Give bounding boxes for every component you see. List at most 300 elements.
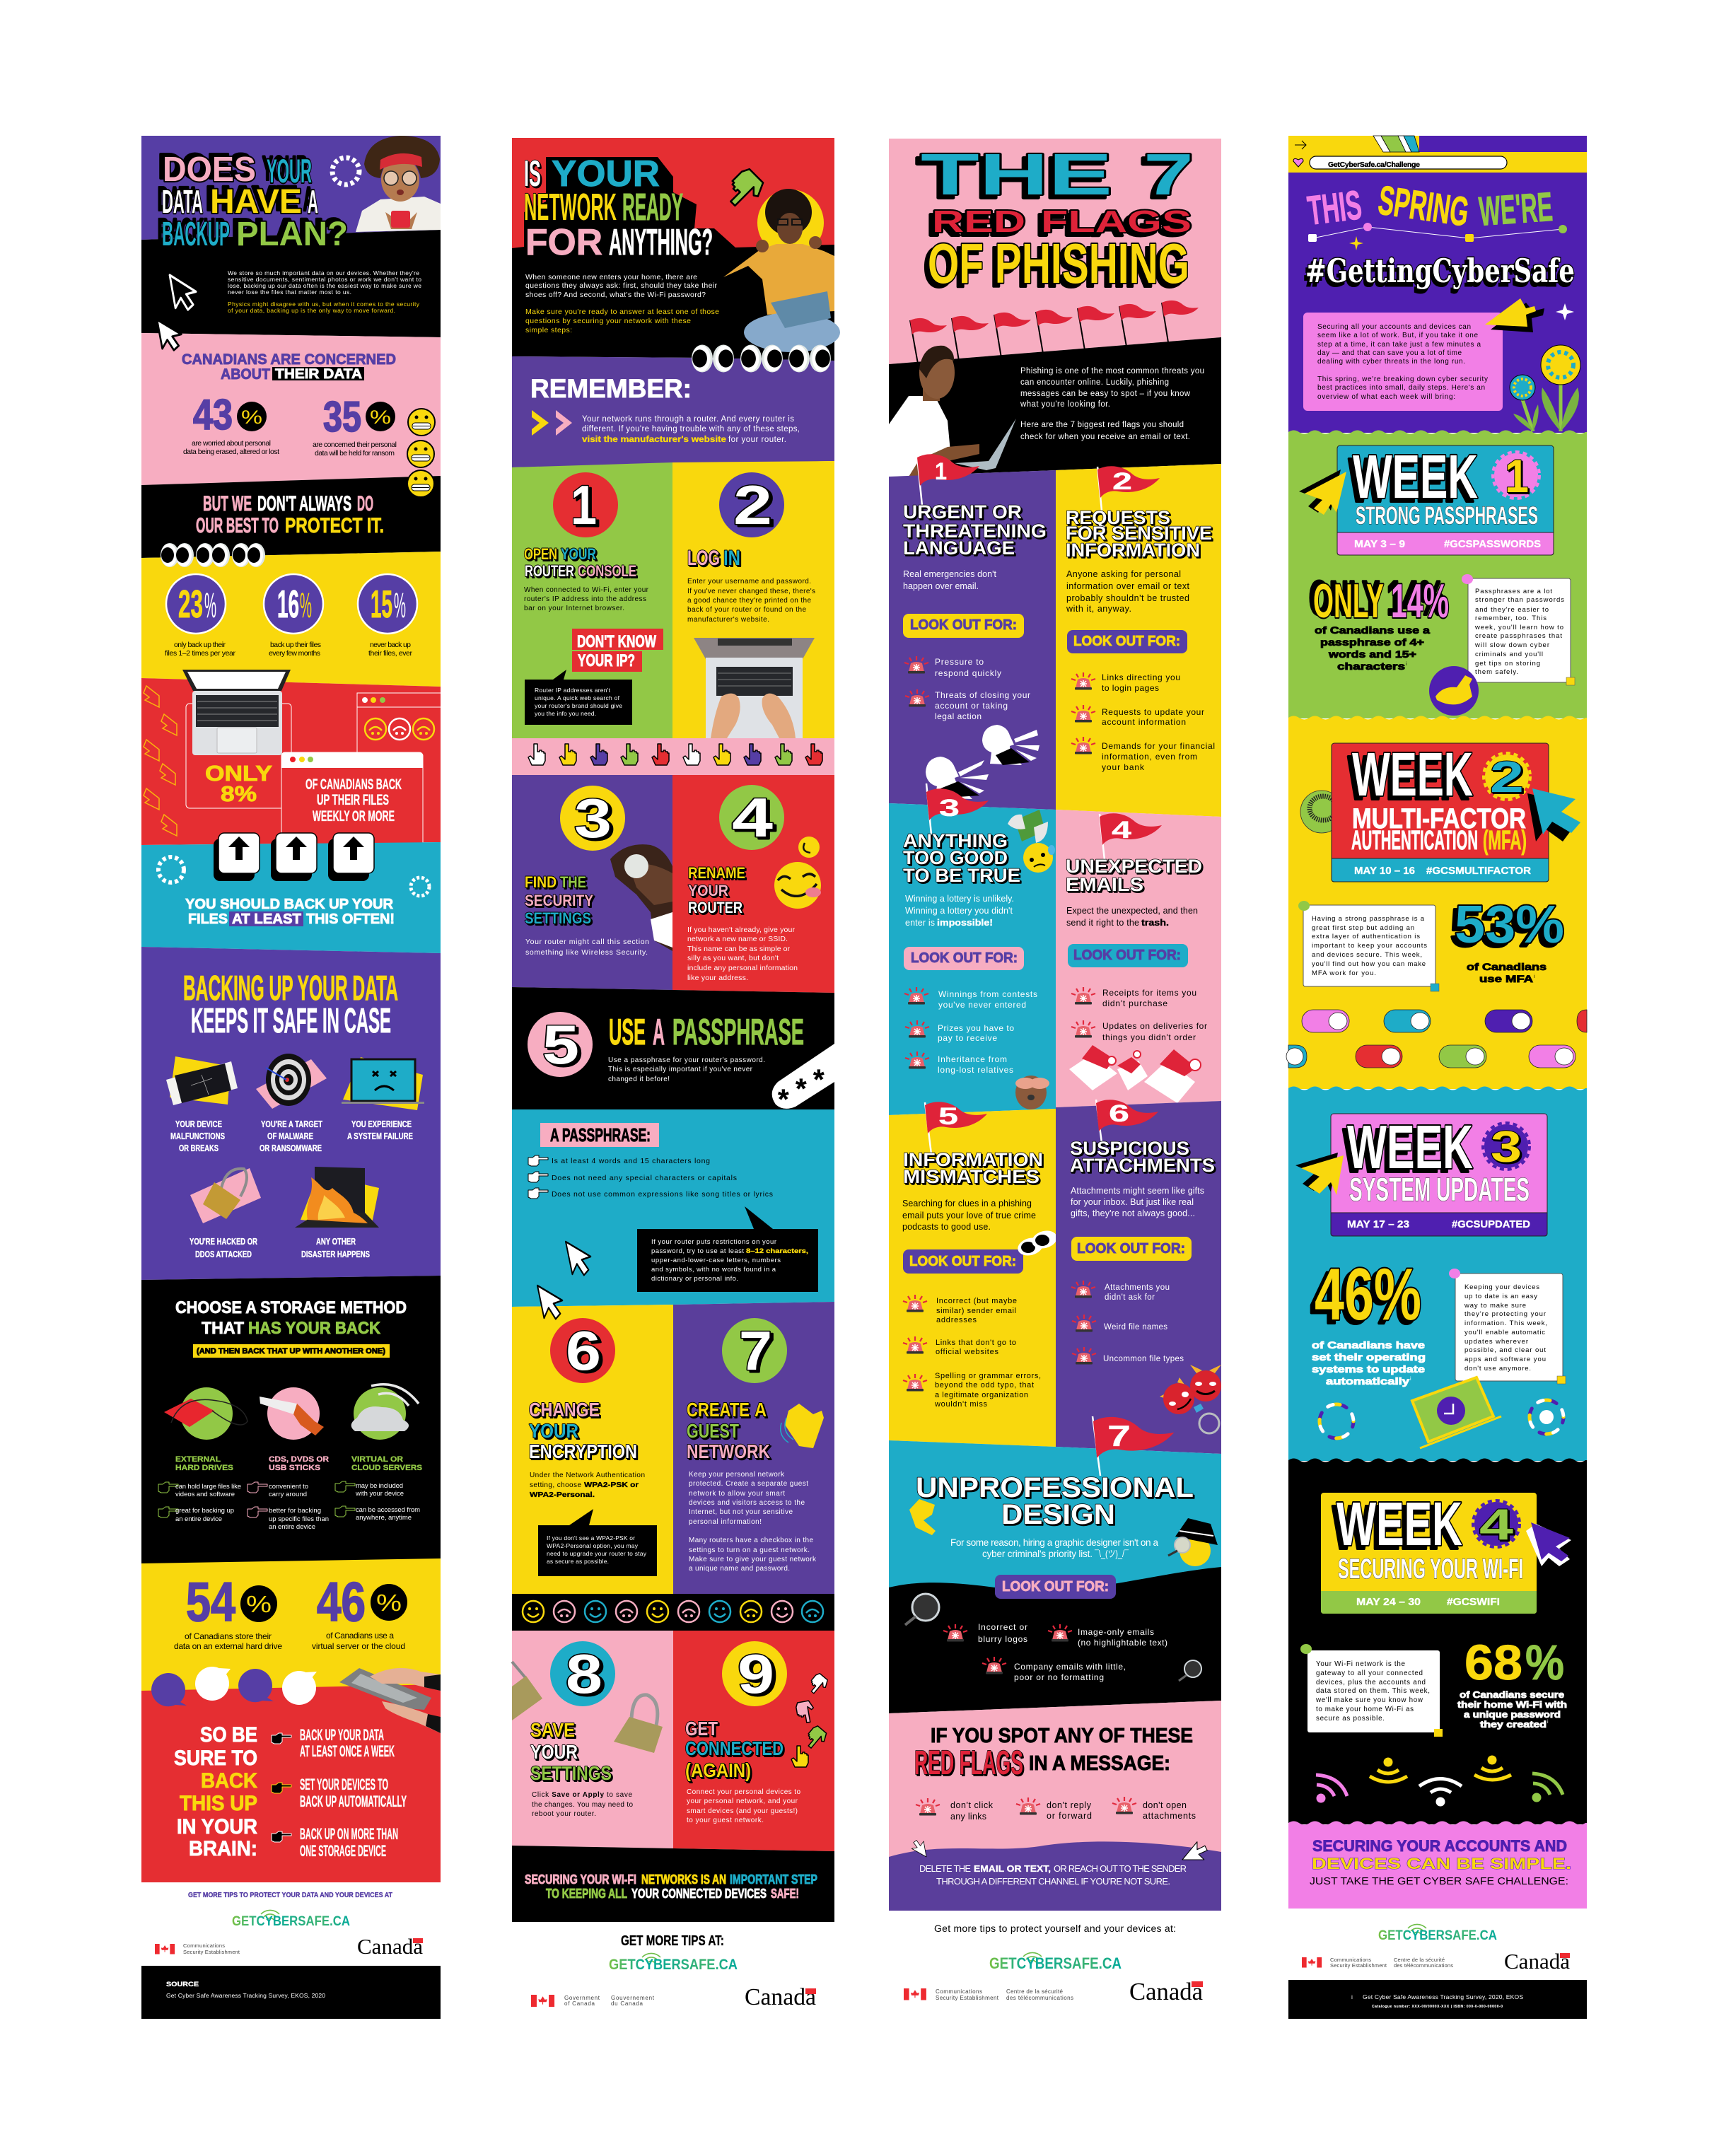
icon: multicolour loaders bbox=[1320, 1400, 1563, 1438]
intro text bbox=[228, 269, 421, 314]
panel: keeps it safe in case bbox=[141, 947, 441, 1280]
step heading: LOG bbox=[687, 547, 720, 570]
stat: 23 percent bbox=[165, 574, 236, 658]
heading: IF YOU SPOT ANY OF THESE bbox=[931, 1725, 1193, 1747]
icon: eyes bbox=[692, 344, 831, 373]
heading bbox=[1066, 856, 1202, 895]
panel: a passphrase definition bbox=[512, 1109, 834, 1307]
text block: trash. bbox=[1141, 918, 1169, 928]
list: attachments bbox=[1143, 1811, 1196, 1821]
callout: If you don't see a WPA2-PSK or bbox=[547, 1534, 635, 1542]
icon: yellow cursor bbox=[1485, 298, 1544, 332]
icon: yellow cursor bbox=[1299, 470, 1346, 515]
item: virtual or cloud servers: VIRTUAL OR bbox=[351, 1455, 403, 1464]
item: virtual or cloud servers: may be included bbox=[356, 1482, 403, 1490]
step text: router's IP address into the address bbox=[524, 595, 646, 603]
stat: 43 percent: 43 bbox=[193, 391, 233, 438]
text card: remember, too. This bbox=[1475, 614, 1547, 622]
week card: MAY 24 – 30 bbox=[1356, 1596, 1421, 1608]
footer: tips and logos: Gouvernement bbox=[611, 1995, 655, 2001]
heading: CANADIANS ARE CONCERNED bbox=[182, 351, 396, 368]
heading: PASSPHRASE bbox=[672, 1012, 804, 1053]
callout: dictionary or personal info. bbox=[651, 1275, 738, 1283]
footer: tips and logos: GETCYBERSAFE.CA bbox=[609, 1957, 738, 1973]
text block: visit the manufacturer's website bbox=[582, 436, 726, 444]
text box bbox=[1303, 313, 1503, 411]
list: to login pages bbox=[1102, 683, 1159, 693]
heading bbox=[1070, 1138, 1215, 1176]
text block bbox=[950, 1537, 1158, 1559]
text block bbox=[902, 1199, 1036, 1232]
list: Links directing you bbox=[1102, 672, 1180, 682]
week card bbox=[1321, 1490, 1537, 1614]
heading: IN A MESSAGE: bbox=[1029, 1752, 1170, 1775]
intro text bbox=[525, 273, 719, 334]
item: external hard drives: videos and software bbox=[175, 1491, 235, 1498]
footer: tips and logos: Canada bbox=[357, 1934, 423, 1959]
step text: the changes. You may need to bbox=[532, 1801, 633, 1809]
icon: grimacing emoji bbox=[407, 470, 434, 497]
step text: Many routers have a checkbox in the bbox=[689, 1537, 813, 1544]
step heading: NETWORK bbox=[687, 1440, 770, 1462]
panel: flag 5 information mismatches bbox=[889, 1076, 1059, 1447]
intro text: Phishing is one of the most common threats you bbox=[1020, 367, 1204, 375]
stat: 16 percent: 16 bbox=[277, 582, 299, 626]
heading bbox=[182, 351, 396, 383]
panel: header with title and intro bbox=[512, 138, 840, 361]
intro text: messages can be easy to spot – if you know bbox=[1020, 390, 1191, 398]
week card: 4 bbox=[1479, 1501, 1514, 1549]
text card: apps and software you bbox=[1464, 1356, 1546, 1363]
step heading bbox=[525, 873, 593, 927]
photo: man with magnifying glass bbox=[610, 844, 672, 951]
item: external hard drives: great for backing up bbox=[175, 1507, 234, 1515]
panel: browser bar bbox=[1288, 136, 1587, 173]
text card: will slow down cyber bbox=[1474, 641, 1549, 649]
step text: setting, choose bbox=[530, 1481, 581, 1489]
panel: flag 1 urgent or threatening language bbox=[889, 454, 1056, 810]
title: DOES bbox=[163, 151, 256, 189]
stat: 15 percent bbox=[358, 574, 417, 658]
panel: emoji band bbox=[512, 1594, 834, 1631]
panel: title bbox=[889, 139, 1221, 364]
stat: 68 percent: i bbox=[1547, 1720, 1549, 1725]
footer: tips and logos: Centre de la sécurité bbox=[1006, 1988, 1064, 1995]
intro text: Here are the 7 biggest red flags you should bbox=[1020, 421, 1184, 429]
text card: them safely. bbox=[1475, 668, 1518, 676]
list bbox=[904, 987, 1037, 1075]
panel: but we don't always do our best bbox=[141, 441, 441, 558]
text card: Passphrases are a lot bbox=[1475, 588, 1552, 595]
text block bbox=[1066, 569, 1190, 614]
week card: MAY 10 – 16 bbox=[1354, 865, 1415, 877]
item: open padlock bbox=[190, 1168, 261, 1259]
panel: challenge call to action: DEVICES CAN BE SIMPLE. bbox=[1312, 1855, 1571, 1872]
icon: shouting heads bbox=[926, 725, 1039, 799]
week card: 2 bbox=[1490, 753, 1524, 802]
text card: Keeping your devices bbox=[1464, 1283, 1539, 1291]
step heading: GUEST bbox=[687, 1420, 739, 1442]
icon: waving hand bbox=[781, 1404, 824, 1448]
callout: need to upgrade your router to stay bbox=[547, 1550, 647, 1557]
title: HAVE bbox=[210, 183, 302, 221]
list: Demands for your financial bbox=[1102, 741, 1215, 751]
item: laptop on fire bbox=[295, 1167, 379, 1259]
text block: Winning a lottery you didn't bbox=[905, 906, 1013, 916]
panel: step 1 bbox=[512, 462, 672, 738]
browser window callout: OF CANADIANS BACK bbox=[305, 776, 402, 793]
step heading: (AGAIN) bbox=[685, 1759, 751, 1781]
icon: loading ring bbox=[158, 857, 184, 882]
tips list: BACK UP AUTOMATICALLY bbox=[300, 1793, 407, 1810]
look out for pill bbox=[903, 1249, 1023, 1274]
stat: 16 percent: % bbox=[300, 585, 312, 625]
photo: surprised woman with phone bbox=[356, 136, 441, 232]
text block: OR REACH OUT TO THE SENDER bbox=[1054, 1863, 1187, 1874]
browser window callout bbox=[281, 752, 423, 848]
week card: MAY 17 – 23 bbox=[1347, 1218, 1409, 1230]
step text: reboot your router. bbox=[532, 1810, 596, 1818]
heading: ABOUT bbox=[221, 366, 270, 383]
stat: only 14 percent: passphrase of 4+ bbox=[1320, 636, 1424, 648]
heading: INFORMATION bbox=[1066, 540, 1200, 561]
footer: tips and logos: Get more tips to protect yourself and your devices at: bbox=[934, 1923, 1176, 1934]
text block: gifts, they're not always good... bbox=[1071, 1208, 1195, 1218]
stat: only 14 percent: of Canadians use a bbox=[1315, 624, 1430, 636]
heading: THAT bbox=[202, 1319, 244, 1338]
heading bbox=[183, 969, 398, 1040]
step heading: YOUR bbox=[530, 1741, 578, 1763]
stat: only 8 percent bbox=[205, 761, 272, 806]
heading: TOO GOOD bbox=[903, 847, 1008, 868]
heading: MISMATCHES bbox=[903, 1166, 1039, 1187]
photo: man with laptop bbox=[889, 346, 1016, 477]
callout: 8–12 characters, bbox=[746, 1247, 808, 1255]
icon: laptop with clock bbox=[1412, 1377, 1501, 1448]
stat: 54 percent: % bbox=[246, 1591, 272, 1617]
panel: week 3 bbox=[1288, 1086, 1587, 1461]
panel: step 3 bbox=[512, 775, 672, 990]
heading: CHOOSE A STORAGE METHOD bbox=[175, 1298, 407, 1317]
callout: don't know your IP bbox=[525, 629, 663, 725]
panel: header with title and intro: ANYTHING? bbox=[609, 222, 713, 263]
stat: only 14 percent: characters bbox=[1337, 660, 1405, 672]
heading: URGENT OR bbox=[903, 501, 1022, 523]
step text: If you've never changed these, there's bbox=[687, 588, 815, 595]
stat: 43 percent: % bbox=[241, 407, 262, 428]
stat: only 14 percent: 14% bbox=[1391, 574, 1449, 628]
intro text: simple steps: bbox=[525, 326, 572, 334]
week card: WEEK bbox=[1352, 740, 1473, 809]
flag number 5: 5 bbox=[938, 1103, 958, 1130]
panel: week 2 bbox=[1286, 716, 1587, 1089]
look out for pill bbox=[1071, 1237, 1192, 1261]
step heading: YOUR bbox=[529, 1420, 578, 1442]
intro text: can encounter online. Luckily, phishing bbox=[1020, 378, 1169, 387]
title: YOUR bbox=[267, 152, 312, 190]
icon: eyes bbox=[1016, 1228, 1059, 1258]
tips list: BACK UP YOUR DATA bbox=[300, 1726, 384, 1744]
footer: logos bbox=[1302, 1924, 1570, 1974]
title: IS bbox=[524, 153, 541, 194]
intro text: We store so much important data on our devices. Whether they're bbox=[228, 269, 419, 276]
flag number 4: 4 bbox=[1112, 817, 1131, 844]
panel: column 4, this spring we're getting cyber safe bbox=[1286, 136, 1587, 2019]
icon: fingerprint bbox=[1300, 791, 1343, 833]
panel: back up at least this often bbox=[141, 833, 441, 953]
intro text: check for when you receive an email or text. bbox=[1020, 433, 1190, 441]
heading: EMAILS bbox=[1066, 874, 1143, 895]
week card bbox=[1332, 740, 1549, 882]
footer: tips and logos: des télécommunications bbox=[1006, 1995, 1073, 2001]
photo: hands on tablet bbox=[339, 1668, 441, 1733]
text card: Having a strong passphrase is a bbox=[1312, 915, 1425, 923]
icon: password pill: * bbox=[778, 1084, 789, 1115]
step heading: CONNECTED bbox=[685, 1737, 784, 1759]
intro text: never lose the files that matter most to us. bbox=[228, 289, 351, 296]
text card bbox=[1300, 1644, 1443, 1737]
text card: extra layer of authentication is bbox=[1312, 933, 1420, 940]
photo: woman with laptop bbox=[723, 189, 840, 352]
text card: updates wherever bbox=[1464, 1338, 1528, 1346]
intro text bbox=[1020, 367, 1204, 441]
list: didn't ask for bbox=[1105, 1293, 1155, 1302]
item: dartboard bbox=[256, 1054, 327, 1153]
flag number 3 bbox=[926, 783, 989, 834]
footer: tips and logos bbox=[155, 1892, 423, 1959]
title: OF PHISHING bbox=[928, 232, 1189, 295]
text card: and they're easier to bbox=[1475, 606, 1549, 614]
heading: PROTECT IT. bbox=[285, 514, 384, 537]
flag number 3: 3 bbox=[939, 795, 960, 822]
list: you've never entered bbox=[938, 1000, 1026, 1010]
footer: tips and logos: Government bbox=[564, 1995, 600, 2001]
stat: only 14 percent: i bbox=[1406, 662, 1407, 667]
panel: step 7 bbox=[537, 1278, 834, 1594]
step text: Connect your personal devices to bbox=[687, 1788, 800, 1796]
item: external hard drives: EXTERNAL bbox=[175, 1455, 221, 1464]
step text: Click Save or Apply to save bbox=[532, 1791, 632, 1799]
stat: 68 percent bbox=[1457, 1635, 1567, 1730]
list: Incorrect (but maybe bbox=[936, 1297, 1017, 1305]
text card bbox=[1462, 574, 1575, 685]
title: RED bbox=[932, 204, 1025, 239]
panel: challenge call to action: JUST TAKE THE GET CYBER SAFE CHALLENGE: bbox=[1310, 1875, 1568, 1887]
panel: closing message: SAFE! bbox=[771, 1887, 799, 1901]
intro text: shoes off? And second, what's the Wi-Fi password? bbox=[525, 291, 706, 299]
item: laptop on fire: ANY OTHER bbox=[316, 1237, 356, 1247]
panel: Canadians are concerned bbox=[141, 315, 441, 485]
title: YOUR bbox=[552, 153, 660, 194]
item: broken phone bbox=[166, 1056, 238, 1153]
footer: tips and logos bbox=[904, 1923, 1203, 2005]
item: broken phone: OR BREAKS bbox=[179, 1143, 219, 1153]
stat: 46 percent: of Canadians have bbox=[1312, 1339, 1425, 1351]
stat: 23 percent: 23 bbox=[178, 582, 203, 626]
text block bbox=[1071, 1186, 1204, 1218]
list: Uncommon file types bbox=[1103, 1355, 1184, 1363]
step text: smart devices (and your guests!) bbox=[687, 1807, 798, 1815]
item: broken phone: YOUR DEVICE bbox=[175, 1119, 222, 1129]
panel: flag 2 requests for sensitive information bbox=[1056, 464, 1221, 817]
stat: 53 percent: 53% bbox=[1455, 895, 1564, 954]
callout: don't know your IP: DON'T KNOW bbox=[577, 632, 656, 651]
panel: step 9 bbox=[673, 1631, 834, 1851]
icon: password pill: * bbox=[796, 1073, 807, 1105]
text box: dealing with cyber threats in the long run. bbox=[1317, 358, 1465, 366]
list: your bank bbox=[1102, 762, 1145, 772]
list: Prizes you have to bbox=[938, 1023, 1014, 1033]
panel: column 1, does your data have a backup plan bbox=[141, 136, 441, 2019]
title: THE bbox=[921, 141, 1112, 207]
icon: magnifiers bbox=[905, 1594, 1201, 1681]
heading: REQUESTS bbox=[1066, 507, 1170, 528]
panel: flag 4 unexpected emails bbox=[1056, 810, 1221, 1107]
step heading: RENAME bbox=[688, 864, 745, 882]
list: didn't purchase bbox=[1102, 998, 1167, 1008]
text card: important to keep your accounts bbox=[1312, 942, 1427, 950]
step text: Enter your username and password. bbox=[687, 578, 811, 585]
stat: 53 percent: i bbox=[1534, 974, 1535, 979]
footer: tips and logos: Canada bbox=[745, 1984, 816, 2010]
step text: Under the Network Authentication bbox=[530, 1472, 645, 1479]
look out for pill bbox=[1067, 630, 1187, 653]
text card: to make your home Wi-Fi as bbox=[1316, 1706, 1414, 1713]
stat: only 14 percent bbox=[1313, 574, 1449, 672]
panel: step 2 bbox=[672, 461, 834, 738]
item: CDs, DVDs or USB sticks: better for backing bbox=[269, 1507, 321, 1515]
stat: 16 percent bbox=[264, 574, 323, 658]
heading: FOR SENSITIVE bbox=[1066, 523, 1212, 544]
number badge bbox=[553, 472, 618, 537]
text block: information over email or text bbox=[1066, 581, 1190, 591]
intro text: Physics might disagree with us, but when it comes to the security bbox=[228, 301, 420, 308]
item: virtual or cloud servers: can be accessed from bbox=[356, 1506, 420, 1514]
heading bbox=[916, 1472, 1194, 1530]
source bar: Catalogue number: XXX-00/0000X-XXX | ISBN: 000-0-000-00000-0 bbox=[1372, 2005, 1503, 2009]
step text: include any personal information bbox=[687, 964, 798, 972]
heading bbox=[175, 1298, 407, 1358]
number badge bbox=[719, 472, 784, 537]
look out for pill: LOOK OUT FOR: bbox=[1077, 1241, 1185, 1257]
list: Receipts for items you bbox=[1102, 988, 1196, 998]
week card: #GCSWIFI bbox=[1447, 1596, 1500, 1608]
stat: 35 percent: % bbox=[370, 407, 391, 428]
step text: network a new name or SSID. bbox=[687, 935, 788, 943]
heading: A bbox=[653, 1012, 665, 1053]
stat: 46 percent: i bbox=[1410, 1377, 1411, 1382]
step heading: THE bbox=[560, 873, 586, 891]
text block: email puts your love of true crime bbox=[902, 1211, 1036, 1220]
panel: challenge call to action: SECURING YOUR ACCOUNTS AND bbox=[1312, 1837, 1567, 1855]
step text: silly as you want, but don't bbox=[687, 954, 779, 962]
title: 7 bbox=[1143, 141, 1194, 207]
list: Requests to update your bbox=[1102, 707, 1204, 717]
icon: wifi symbols bbox=[1316, 1757, 1563, 1805]
step text: back of your router or found on the bbox=[687, 606, 806, 614]
browser window callout: WEEKLY OR MORE bbox=[313, 808, 395, 824]
heading: INFORMATION bbox=[903, 1149, 1043, 1170]
callout: upper-and-lower-case letters, numbers bbox=[651, 1257, 781, 1264]
stat: 23 percent: % bbox=[204, 585, 216, 625]
panel: browser bar: GetCyberSafe.ca/Challenge bbox=[1328, 161, 1420, 169]
stat: 35 percent: data will be held for ransom bbox=[315, 449, 395, 458]
callout: don't know your IP: YOUR IP? bbox=[578, 651, 635, 670]
title: READY bbox=[622, 186, 683, 228]
step text: network to allow your smart bbox=[689, 1490, 785, 1498]
flag number 7 bbox=[1093, 1416, 1174, 1476]
step text: WPA2-Personal. bbox=[530, 1491, 595, 1499]
text box: Securing all your accounts and devices can bbox=[1317, 323, 1471, 331]
callout bbox=[538, 1509, 657, 1576]
panel: header with title and intro bbox=[141, 136, 441, 337]
heading: LANGUAGE bbox=[903, 537, 1015, 559]
item: dartboard: YOU'RE A TARGET bbox=[261, 1119, 322, 1129]
step heading bbox=[687, 1399, 770, 1462]
stat: 46 percent bbox=[1312, 1254, 1426, 1387]
step text: like your address. bbox=[687, 974, 748, 982]
intro text: what you're looking for. bbox=[1020, 400, 1110, 409]
footer: logos: Communications bbox=[1330, 1957, 1371, 1963]
list bbox=[1071, 672, 1215, 772]
text block: Attachments might seem like gifts bbox=[1071, 1186, 1204, 1196]
icon: thumbs down bbox=[909, 1499, 936, 1535]
stat: 53 percent: of Canadians bbox=[1467, 961, 1547, 972]
text box: best practices into small, daily steps. Here's an bbox=[1317, 384, 1485, 392]
source bar: Get Cyber Safe Awareness Tracking Survey, 2020, EKOS bbox=[1363, 1993, 1523, 2000]
heading bbox=[914, 1725, 1193, 1782]
checklist bbox=[528, 1155, 773, 1199]
number badge bbox=[722, 1318, 787, 1383]
panel: closing message bbox=[512, 1846, 834, 1922]
text card: data stored on them. This week, bbox=[1316, 1687, 1430, 1695]
step heading: GET bbox=[685, 1718, 718, 1740]
heading bbox=[609, 1012, 804, 1053]
list: Updates on deliveries for bbox=[1102, 1021, 1207, 1031]
heading: BUT WE bbox=[203, 492, 252, 515]
tips list: SET YOUR DEVICES TO bbox=[300, 1776, 388, 1793]
stat: 46 percent: set their operating bbox=[1312, 1351, 1426, 1363]
stat: 68 percent: their home Wi-Fi with bbox=[1457, 1699, 1567, 1710]
heading bbox=[903, 1149, 1043, 1187]
item: dartboard: OR RANSOMWARE bbox=[260, 1143, 322, 1153]
heading: HAS YOUR BACK bbox=[248, 1319, 381, 1338]
heading: AT LEAST bbox=[232, 911, 301, 927]
icon: teal cursor bbox=[1527, 788, 1580, 841]
item: failed laptop bbox=[342, 1057, 424, 1141]
list: Image-only emails bbox=[1078, 1627, 1154, 1637]
step text: devices and visitors access to the bbox=[689, 1499, 805, 1507]
panel: closing message: SECURING YOUR WI-FI bbox=[525, 1872, 636, 1887]
step heading: ROUTER bbox=[688, 899, 742, 916]
panel: choose a storage method bbox=[141, 1276, 441, 1565]
icon: pixel pointing hand bbox=[721, 167, 767, 212]
panel: week 4 bbox=[1288, 1458, 1587, 1824]
icon: password pill bbox=[772, 1044, 834, 1115]
icon: upload keys bbox=[214, 833, 374, 881]
heading bbox=[1066, 507, 1212, 561]
icon: password pill: * bbox=[813, 1064, 825, 1095]
footer: logos: GETCYBERSAFE.CA bbox=[1378, 1928, 1497, 1943]
icon: cursor bbox=[566, 1235, 594, 1279]
panel: so be sure to back this up in your brain bbox=[141, 1667, 441, 1882]
list: wouldn't miss bbox=[934, 1400, 987, 1409]
footer: tips and logos: du Canada bbox=[611, 2000, 643, 2007]
icon: eyes bbox=[161, 543, 265, 567]
panel: flag 3 anything too good to be true bbox=[889, 783, 1056, 1115]
stat: 46 percent: of Canadians use a bbox=[326, 1631, 394, 1641]
step heading: YOUR bbox=[561, 545, 596, 563]
